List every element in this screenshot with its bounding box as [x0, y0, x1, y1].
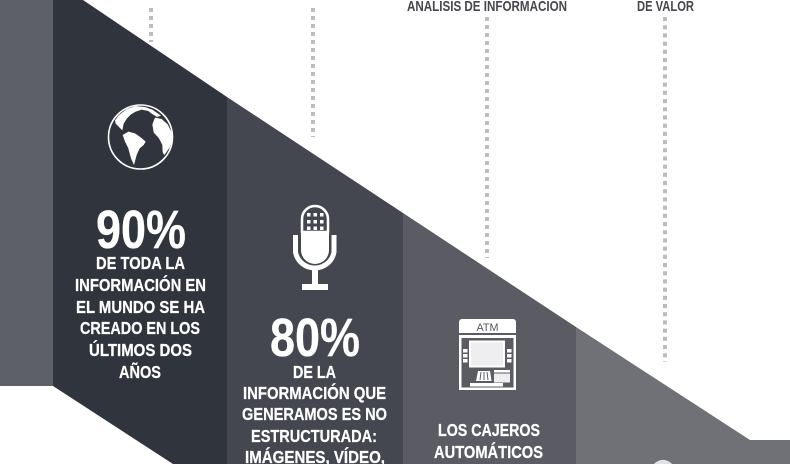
- text block: 90% description: CREADO EN LOS: [80, 318, 200, 338]
- text block: 90% description: DE TODA LA: [96, 253, 185, 273]
- panel: column 3 ATMs: [403, 213, 576, 464]
- stat: 80%: 80%: [270, 308, 360, 368]
- text block: 90% description: EL MUNDO SE HA: [76, 297, 205, 317]
- text block: ATMs: [434, 420, 543, 462]
- text block: 80% description: INFORMACIÓN QUE: [243, 382, 386, 403]
- text block: 80% description: DE LA: [293, 362, 336, 382]
- panel: column 2 unstructured data: [227, 97, 403, 464]
- icon: globe: [108, 105, 172, 169]
- dotted connector 1: [149, 8, 153, 42]
- text block: 90% description: ÚLTIMOS DOS: [89, 339, 192, 360]
- text block: 80% description: GENERAMOS ES NO: [242, 404, 387, 424]
- dotted connector 3: [485, 17, 489, 258]
- dotted connector 2: [311, 8, 315, 137]
- icon: ATM: ATM: [476, 322, 498, 334]
- panel: column 1 world data: [53, 0, 227, 464]
- text block: ATMs: LOS CAJEROS: [438, 420, 540, 440]
- text block: 80% description: ESTRUCTURADA:: [251, 426, 377, 446]
- text block: 90% description: INFORMACIÓN EN: [75, 274, 206, 295]
- icon: ATM: [459, 319, 516, 390]
- dotted connector 4: [663, 17, 667, 362]
- text block: 90% description: AÑOS: [119, 361, 161, 382]
- icon: microphone: [296, 206, 334, 290]
- panel: left band: [0, 0, 53, 386]
- text block: 90% description: [75, 253, 206, 382]
- text block: 80% description: [242, 362, 387, 464]
- panel: column 4: [576, 327, 790, 464]
- icon: partially visible circle: [654, 460, 672, 464]
- stat: 90%: 90%: [96, 200, 186, 260]
- text block: ATMs: AUTOMÁTICOS: [434, 441, 543, 462]
